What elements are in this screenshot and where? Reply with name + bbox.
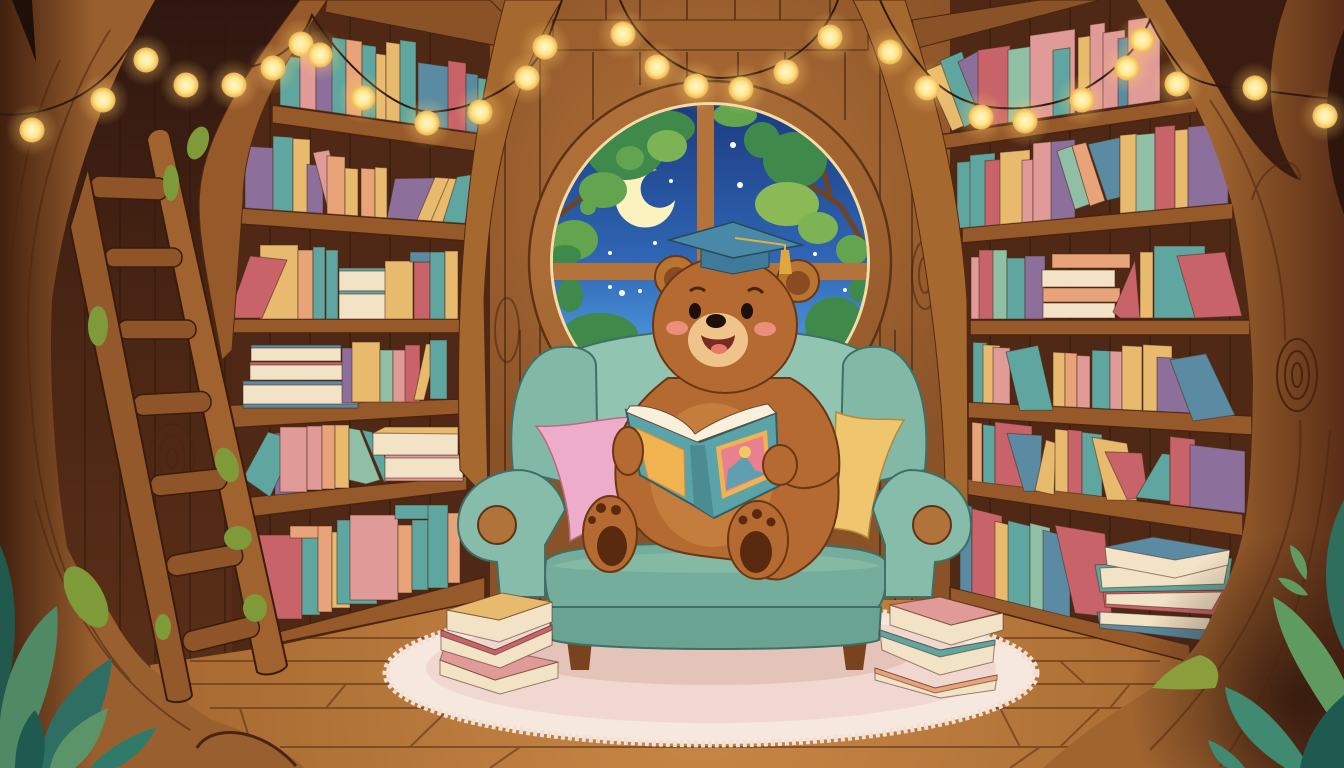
wall knots — [495, 241, 938, 362]
shelf boards — [226, 105, 487, 643]
right paw — [763, 445, 797, 485]
left paw — [613, 427, 643, 475]
floor stack of books, right — [875, 597, 1003, 698]
books row 4 — [243, 340, 447, 408]
base — [549, 607, 881, 649]
tree branches — [560, 165, 862, 240]
yellow pillow — [832, 412, 904, 538]
books row 1 — [925, 15, 1160, 135]
moon — [615, 168, 675, 228]
dark interior left — [40, 0, 315, 680]
wooden pillars — [199, 0, 968, 510]
foliage — [549, 103, 868, 357]
head — [653, 257, 797, 393]
books row 1 — [280, 23, 490, 135]
slanted top beam left — [325, 0, 508, 48]
belly — [650, 403, 774, 547]
stars — [608, 142, 847, 296]
body — [615, 378, 839, 579]
knot — [1277, 339, 1317, 411]
right arm outline — [787, 472, 839, 488]
ears — [655, 256, 697, 298]
round window — [528, 80, 892, 348]
slanted top beam right — [912, 0, 1100, 48]
rungs — [90, 176, 261, 654]
shelf back left — [225, 0, 490, 640]
seat cushion — [545, 543, 886, 607]
books row 5 — [243, 425, 463, 497]
books row 5 — [972, 413, 1245, 517]
book — [626, 404, 779, 518]
armchair — [458, 329, 971, 670]
tongue — [711, 344, 727, 354]
left shelf unit — [226, 23, 490, 643]
right shelf unit — [925, 15, 1252, 662]
plants, bottom right — [1208, 500, 1344, 768]
nose — [706, 314, 726, 328]
books row 2 — [957, 120, 1228, 228]
left arm — [458, 470, 565, 597]
top beam — [553, 20, 868, 50]
floor stack of books, left — [440, 593, 558, 694]
rug — [386, 602, 1036, 744]
pink pillow — [536, 417, 636, 541]
stacked books on right shelf — [1095, 537, 1232, 640]
plants, bottom left — [0, 545, 157, 768]
eyes — [689, 303, 701, 319]
mouth — [701, 335, 735, 352]
brows — [690, 288, 763, 293]
floor — [150, 600, 1260, 768]
bear — [583, 222, 839, 579]
books row 3 — [971, 246, 1242, 319]
left wing — [511, 347, 598, 490]
left rail — [70, 167, 192, 702]
left foot — [583, 496, 637, 572]
books row 6 — [258, 505, 460, 619]
seat top highlight — [552, 552, 880, 573]
graduation cap — [669, 222, 802, 274]
left tree trunk — [0, 0, 305, 768]
dark wedges — [1165, 0, 1300, 180]
books row 4 — [973, 336, 1235, 423]
wires — [0, 0, 1344, 115]
cheeks — [666, 321, 688, 335]
right tree trunk — [1043, 0, 1344, 768]
shelf back right — [950, 0, 1260, 660]
books row 6 — [960, 497, 1112, 627]
ladder — [54, 124, 287, 702]
moss on trunk — [1152, 655, 1218, 690]
right rail — [147, 129, 287, 674]
right wing — [840, 347, 926, 490]
center back — [570, 329, 870, 480]
right arm — [873, 470, 971, 597]
root loop — [197, 733, 296, 766]
right arm — [764, 430, 839, 488]
right foot — [728, 501, 788, 579]
legs — [567, 640, 867, 670]
muzzle — [688, 313, 748, 367]
string lights — [0, 0, 1344, 156]
moss — [54, 124, 267, 640]
wood knot in left interior — [150, 424, 194, 492]
shelf boards — [938, 97, 1252, 662]
books row 2 — [245, 134, 475, 224]
shadow lower right — [1130, 530, 1344, 768]
books row 3 — [228, 245, 458, 319]
dark wedge upper left — [12, 0, 36, 62]
